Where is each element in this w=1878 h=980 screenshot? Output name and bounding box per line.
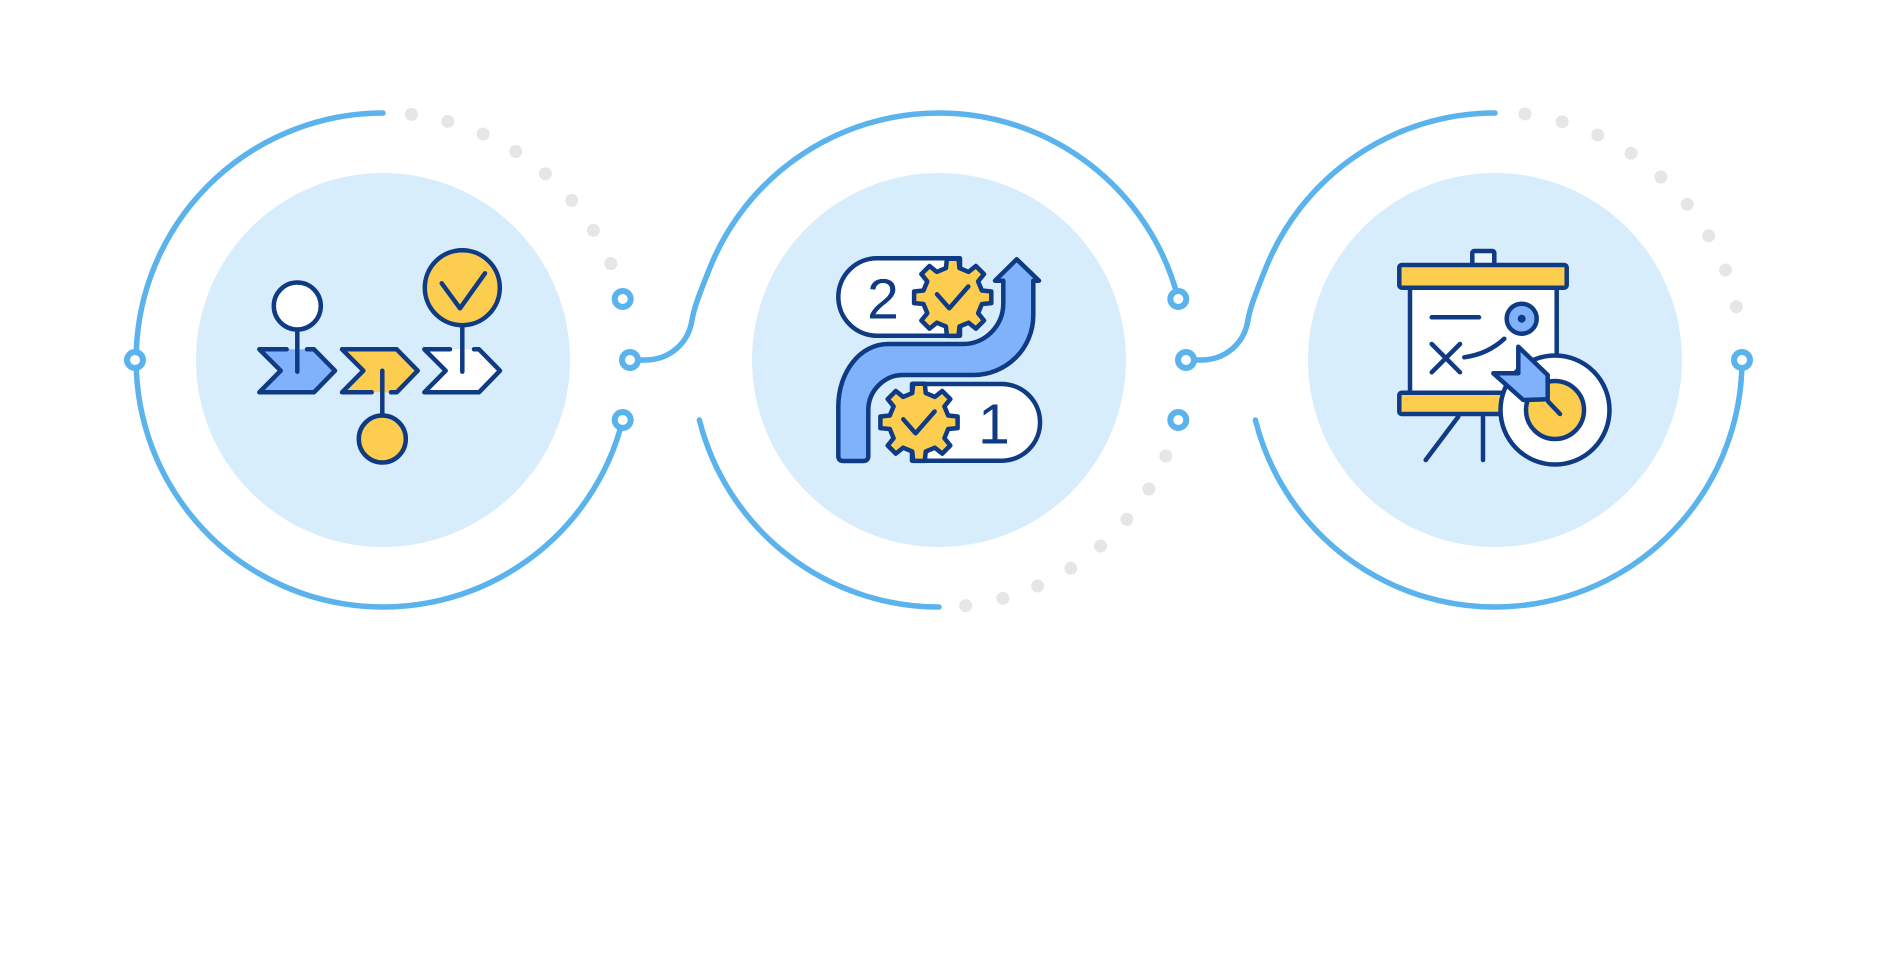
- pill step 2: [838, 258, 960, 336]
- bottom bar: [1399, 393, 1509, 414]
- board screen: [1410, 286, 1557, 393]
- ring arc 3 top with connector: [1194, 113, 1495, 360]
- check pin: [425, 250, 500, 372]
- dotted arc 3: [1518, 108, 1743, 313]
- dotted arc 1: [405, 108, 617, 270]
- dotted arc 2: [959, 450, 1172, 612]
- background circle 1: [196, 173, 570, 547]
- gear bottom: [880, 384, 958, 461]
- gear top: [914, 259, 991, 336]
- chevron yellow: [342, 349, 418, 392]
- ring node lower right: [1170, 412, 1186, 428]
- connector node left: [622, 352, 638, 368]
- connector node left: [1178, 352, 1194, 368]
- icon: two step route: [838, 258, 1040, 461]
- pill step 1: [912, 384, 1040, 461]
- cross mark: [1432, 344, 1460, 372]
- hanger tab: [1472, 251, 1494, 266]
- ring arc 2 top with connector: [638, 113, 1178, 360]
- ring arc 3 bottom: [1255, 360, 1742, 607]
- board legs: [1426, 417, 1483, 460]
- chevron blue: [259, 349, 335, 392]
- panel: step 3 strategy: [1178, 108, 1750, 607]
- yellow pin: [359, 371, 406, 462]
- dart: [1493, 347, 1560, 414]
- chevron white: [424, 349, 500, 392]
- play curve: [1464, 339, 1504, 357]
- background circle 2: [752, 173, 1126, 547]
- ring node left: [127, 352, 143, 368]
- icon: strategy board and target: [1399, 251, 1610, 464]
- target: [1500, 356, 1610, 464]
- icon: workflow chevrons: [259, 250, 500, 462]
- board dash: [1432, 315, 1479, 320]
- ring node upper right: [615, 291, 631, 307]
- background circle 3: [1308, 173, 1682, 547]
- ring node lower right: [615, 412, 631, 428]
- number 2: 2: [867, 268, 899, 332]
- panel: step 1 workflow: [127, 108, 631, 607]
- panel: step 2 gears: [622, 113, 1186, 612]
- ring arc 1: [136, 113, 623, 607]
- top bar: [1399, 265, 1567, 288]
- white pin: [274, 282, 321, 372]
- ring node right: [1734, 352, 1750, 368]
- circle mark: [1507, 304, 1537, 334]
- number 1: 1: [978, 392, 1010, 456]
- arrow winding upward: [838, 259, 1039, 461]
- ring node upper right: [1170, 291, 1186, 307]
- ring arc 2 bottom: [699, 420, 939, 607]
